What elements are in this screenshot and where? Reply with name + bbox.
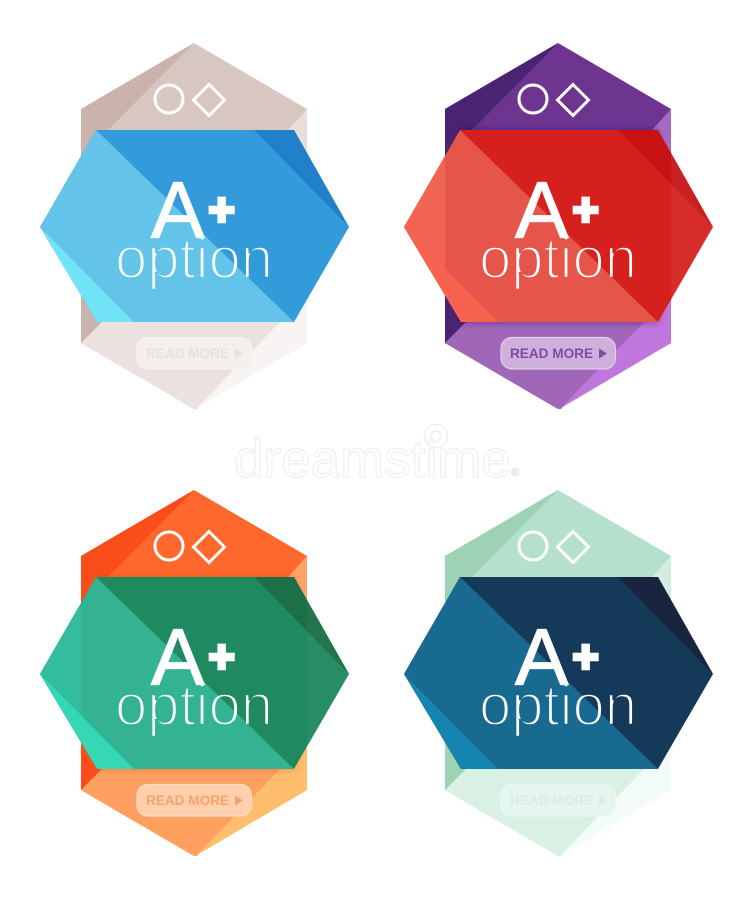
- icon: circle: [519, 85, 547, 113]
- heading: A+: +: [572, 184, 599, 235]
- icon: circle: [155, 532, 183, 560]
- front hexagon: green: [40, 577, 349, 769]
- shadow behind front hexagon: [96, 577, 294, 769]
- icon: diamond: [194, 84, 224, 116]
- panel: navy hexagon option: [404, 490, 713, 856]
- icon: diamond: [194, 532, 224, 562]
- heading: A+: +: [572, 631, 599, 682]
- heading: option: option: [115, 673, 273, 738]
- front hexagon: red: [404, 130, 713, 322]
- heading: A+: A: [151, 166, 205, 254]
- heading: A+: A: [515, 612, 569, 702]
- heading: A+: +: [208, 184, 235, 235]
- front hexagon: navy: [404, 577, 713, 769]
- heading: option: option: [479, 226, 637, 291]
- shadow behind front hexagon: [460, 130, 658, 322]
- icon: diamond: [558, 532, 588, 562]
- heading: A+: [151, 166, 235, 254]
- icon: diamond: [558, 84, 588, 116]
- heading: A+: A: [151, 612, 205, 702]
- heading: A+: [151, 612, 235, 702]
- heading: A+: A: [515, 166, 569, 254]
- back hexagon: mint: [445, 490, 671, 856]
- heading: A+: +: [208, 631, 235, 682]
- back hexagon: beige: [81, 43, 307, 409]
- back hexagon: orange: [81, 490, 307, 856]
- button: read more: READ MORE: [510, 345, 593, 361]
- heading: A+: [515, 166, 599, 254]
- panel: green hexagon option: [40, 490, 349, 856]
- watermark: dreamstime: dreamstime: [234, 430, 511, 489]
- icon: circle: [519, 532, 547, 560]
- button: read more: READ MORE: [510, 792, 593, 808]
- button: read more: READ MORE: [146, 792, 229, 808]
- panel: blue hexagon option: [40, 43, 349, 409]
- button: read more: [137, 784, 252, 816]
- heading: option: option: [115, 226, 273, 291]
- icon: circle: [155, 85, 183, 113]
- front hexagon: blue: [40, 130, 349, 322]
- button: read more: [137, 338, 252, 369]
- button: read more: READ MORE: [146, 345, 229, 361]
- button: read more: [501, 338, 616, 369]
- panel: red hexagon option: [404, 43, 713, 409]
- heading: A+: [515, 612, 599, 702]
- back hexagon: purple: [445, 43, 671, 409]
- button: read more: [501, 784, 616, 816]
- heading: option: option: [479, 673, 637, 738]
